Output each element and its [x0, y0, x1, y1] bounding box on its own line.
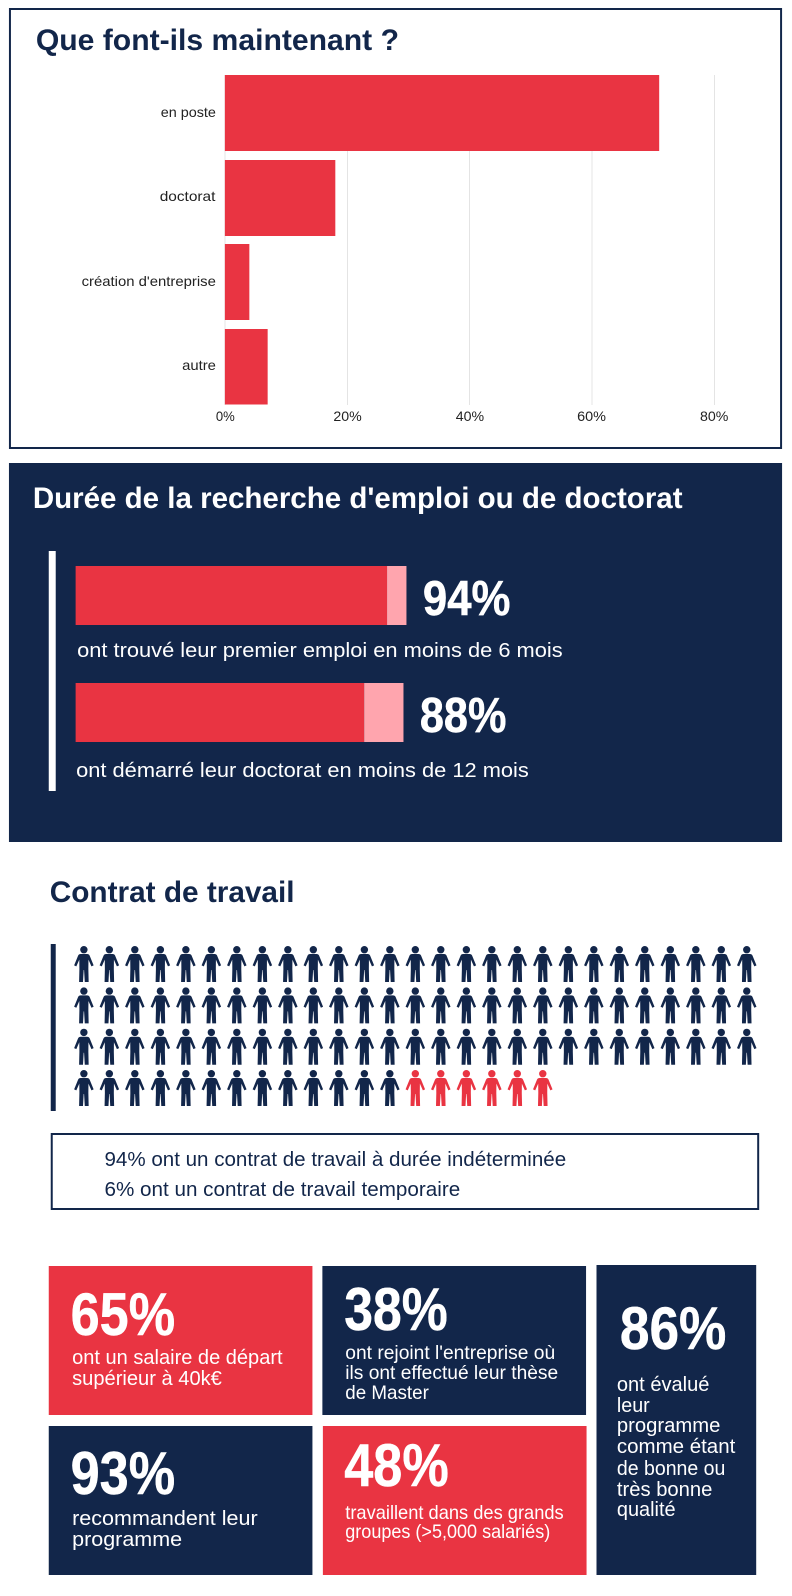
card: salaire 65%: 65% — [71, 1281, 175, 1348]
card: qualité 86%: 86% — [620, 1295, 726, 1362]
card: entreprise 38% — [322, 1266, 586, 1415]
card: recommandation 93%: programme — [72, 1529, 182, 1551]
card: grands groupes 48%: groupes (>5,000 salariés) — [345, 1522, 550, 1543]
heading: que font-ils maintenant: Que font-ils maintenant ? — [36, 24, 399, 57]
card: qualité 86%: de bonne ou — [617, 1458, 725, 1480]
heading: contrat de travail: Contrat de travail — [50, 876, 295, 909]
bar chart: situation actuelle: 60% — [577, 409, 606, 424]
card: entreprise 38%: ils ont effectué leur thèse — [345, 1363, 558, 1384]
text: premier emploi: ont trouvé leur premier emploi en moins de 6 mois — [77, 640, 563, 662]
card: recommandation 93%: recommandent leur — [72, 1508, 258, 1530]
bar chart: situation actuelle: création d'entreprise — [82, 274, 216, 289]
stat: 94%: 94% — [423, 572, 510, 626]
bar chart: situation actuelle — [82, 75, 728, 424]
card: qualité 86%: ont évalué — [617, 1374, 709, 1396]
card: grands groupes 48%: 48% — [344, 1432, 449, 1499]
text: doctorat: ont démarré leur doctorat en moins de 12 mois — [76, 760, 529, 782]
legend: type de contrat: 6% ont un contrat de travail temporaire — [104, 1179, 460, 1201]
progress bar: 88% — [76, 683, 403, 742]
card: entreprise 38%: 38% — [344, 1276, 448, 1343]
bar chart: situation actuelle: 20% — [333, 409, 362, 424]
card: qualité 86%: très bonne — [617, 1479, 712, 1501]
pictogram: 100 personnes — [51, 944, 756, 1111]
bar chart: situation actuelle: 0% — [216, 409, 235, 424]
bar chart: situation actuelle: autre — [182, 358, 216, 373]
card: qualité 86%: leur — [617, 1395, 650, 1417]
stat: 88%: 88% — [420, 689, 506, 743]
card: qualité 86%: programme — [617, 1415, 720, 1437]
card: recommandation 93% — [49, 1426, 312, 1575]
card: salaire 65%: supérieur à 40k€ — [72, 1368, 222, 1390]
legend: type de contrat: 94% ont un contrat de travail à durée indéterminée — [104, 1149, 566, 1171]
legend: type de contrat — [52, 1134, 758, 1209]
heading: durée de la recherche: Durée de la recherche d'emploi ou de doctorat — [33, 482, 683, 515]
bar chart: situation actuelle: 80% — [700, 409, 728, 424]
bar chart: situation actuelle: doctorat — [160, 189, 216, 204]
card: recommandation 93%: 93% — [71, 1440, 175, 1507]
card: entreprise 38%: ont rejoint l'entreprise où — [345, 1343, 555, 1364]
card: grands groupes 48%: travaillent dans des grands — [345, 1503, 564, 1524]
card: qualité 86% — [597, 1265, 756, 1575]
card: salaire 65%: ont un salaire de départ — [72, 1347, 283, 1369]
card: qualité 86%: qualité — [617, 1499, 676, 1521]
panel: que font-ils maintenant — [10, 9, 781, 448]
card: entreprise 38%: de Master — [345, 1383, 429, 1404]
card: salaire 65% — [49, 1266, 312, 1415]
card: grands groupes 48% — [323, 1426, 587, 1575]
progress bar: 94% — [76, 566, 406, 625]
bar chart: situation actuelle: en poste — [161, 105, 216, 120]
panel: durée de la recherche — [9, 463, 782, 842]
card: qualité 86%: comme étant — [617, 1436, 736, 1458]
bar chart: situation actuelle: 40% — [456, 409, 484, 424]
